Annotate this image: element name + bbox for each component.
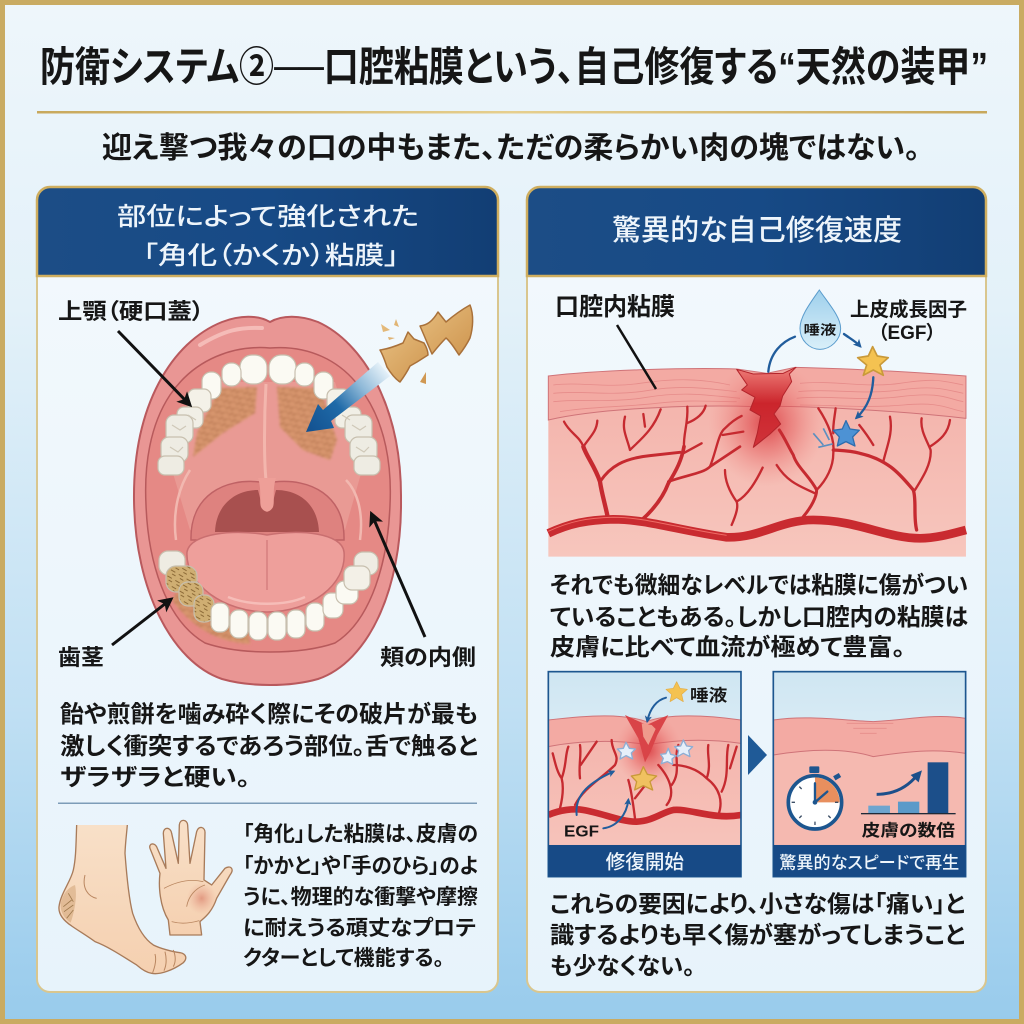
mini label: EGF: EGF (564, 824, 599, 841)
body text: impact area: 飴や煎餅を噛み砕く際にその破片が最も (60, 700, 478, 727)
blood vessels (564, 406, 950, 530)
label: gum (58, 600, 170, 670)
arrows: saliva flow (768, 334, 873, 418)
rough palate patches (193, 387, 337, 460)
text: keratinized explanation: に耐えうる頑丈なプロテ (243, 917, 476, 940)
upper teeth (158, 355, 380, 475)
caption: rapid regeneration (773, 845, 966, 877)
label: EGF (850, 298, 967, 344)
text: keratinized explanation (243, 822, 478, 970)
body text: blood flow: ていることもある。しかし口腔内の粘膜は (550, 604, 968, 630)
mini wound (625, 715, 668, 762)
rice cracker fragments (380, 305, 473, 384)
body text: impact area: 激しく衝突するであろう部位。舌で触ると (60, 733, 478, 759)
panel header: self repair: 驚異的な自己修復速度 (612, 214, 902, 247)
panel: keratinized mucosa (37, 187, 498, 992)
label: inner cheek (372, 515, 476, 670)
text: keratinized explanation: 「角化」した粘膜は、皮膚の (243, 822, 478, 846)
saliva drop: 唾液 (804, 323, 836, 338)
label: gum: 歯茎 (58, 645, 104, 670)
panel header: keratinized mucosa: 「角化（かくか）粘膜」 (143, 242, 399, 270)
foot (59, 825, 186, 974)
caption: repair start (548, 845, 741, 877)
mini label: saliva: 唾液 (690, 686, 728, 705)
body text: conclusion (550, 891, 965, 979)
label: inner cheek: 頬の内側 (380, 645, 476, 670)
wound redness (717, 372, 816, 478)
illustration: mucosa cross-section (548, 290, 966, 557)
body text: blood flow (550, 571, 968, 660)
tongue (187, 532, 344, 612)
label: upper jaw (58, 299, 204, 404)
illustration: open mouth (134, 305, 473, 685)
label: EGF: （EGF） (878, 322, 936, 344)
palate (172, 382, 362, 530)
body text: blood flow: それでも微細なレベルでは粘膜に傷がつい (550, 571, 968, 598)
label: oral mucosa: 口腔内粘膜 (555, 293, 675, 321)
body text: blood flow: 皮膚に比べて血流が極めて豊富。 (550, 633, 905, 660)
mini panel: repair start (548, 672, 741, 877)
growth bar chart (861, 762, 956, 814)
blue star (833, 421, 859, 446)
body text: conclusion: も少なくない。 (550, 953, 695, 979)
mini panel: rapid regeneration (773, 672, 966, 877)
body text: impact area (60, 700, 478, 790)
body text: impact area: ザラザラと硬い。 (60, 764, 250, 790)
epithelium (548, 367, 966, 420)
caption: repair start: 修復開始 (606, 851, 684, 873)
receptor marks (813, 428, 833, 447)
illustration: foot and palm (59, 820, 232, 974)
gold star (858, 347, 888, 375)
body text: conclusion: これらの要因により、小さな傷は「痛い」と (550, 891, 965, 917)
gold divider (37, 111, 987, 114)
rough gum patch (172, 590, 250, 644)
text: keratinized explanation: 「かかと」や「手のひら」のよ (243, 855, 478, 878)
impact arrow (306, 362, 390, 432)
text: keratinized explanation: うに、物理的な衝撃や摩擦 (243, 886, 478, 909)
saliva drop (800, 290, 841, 349)
body text: conclusion: 識するよりも早く傷が塞がってしまうこと (550, 921, 965, 948)
label: EGF: 上皮成長因子 (850, 298, 967, 321)
mini label: multiple of skin: 皮膚の数倍 (862, 822, 955, 840)
panel header: keratinized mucosa (37, 187, 498, 276)
arrow: to regeneration (748, 735, 767, 775)
text: keratinized explanation: クターとして機能する。 (243, 947, 444, 970)
panel header: keratinized mucosa: 部位によって強化された (117, 203, 419, 231)
mini panel frame (548, 672, 741, 877)
dermis (548, 404, 966, 557)
label: upper jaw: 上顎（硬口蓋） (58, 299, 204, 324)
wound crack (737, 367, 796, 447)
panel header: self repair (527, 187, 986, 276)
main artery (548, 517, 966, 538)
lower teeth (159, 551, 378, 640)
subtitle: 迎え撃つ我々の口の中もまた、ただの柔らかい肉の塊ではない。 (102, 132, 920, 165)
throat and uvula (175, 470, 361, 540)
palm (150, 820, 232, 935)
panel: self repair (527, 187, 986, 992)
stopwatch icon (788, 766, 842, 829)
label: oral mucosa (555, 293, 675, 389)
caption: rapid regeneration: 驚異的なスピードで再生 (779, 852, 959, 872)
